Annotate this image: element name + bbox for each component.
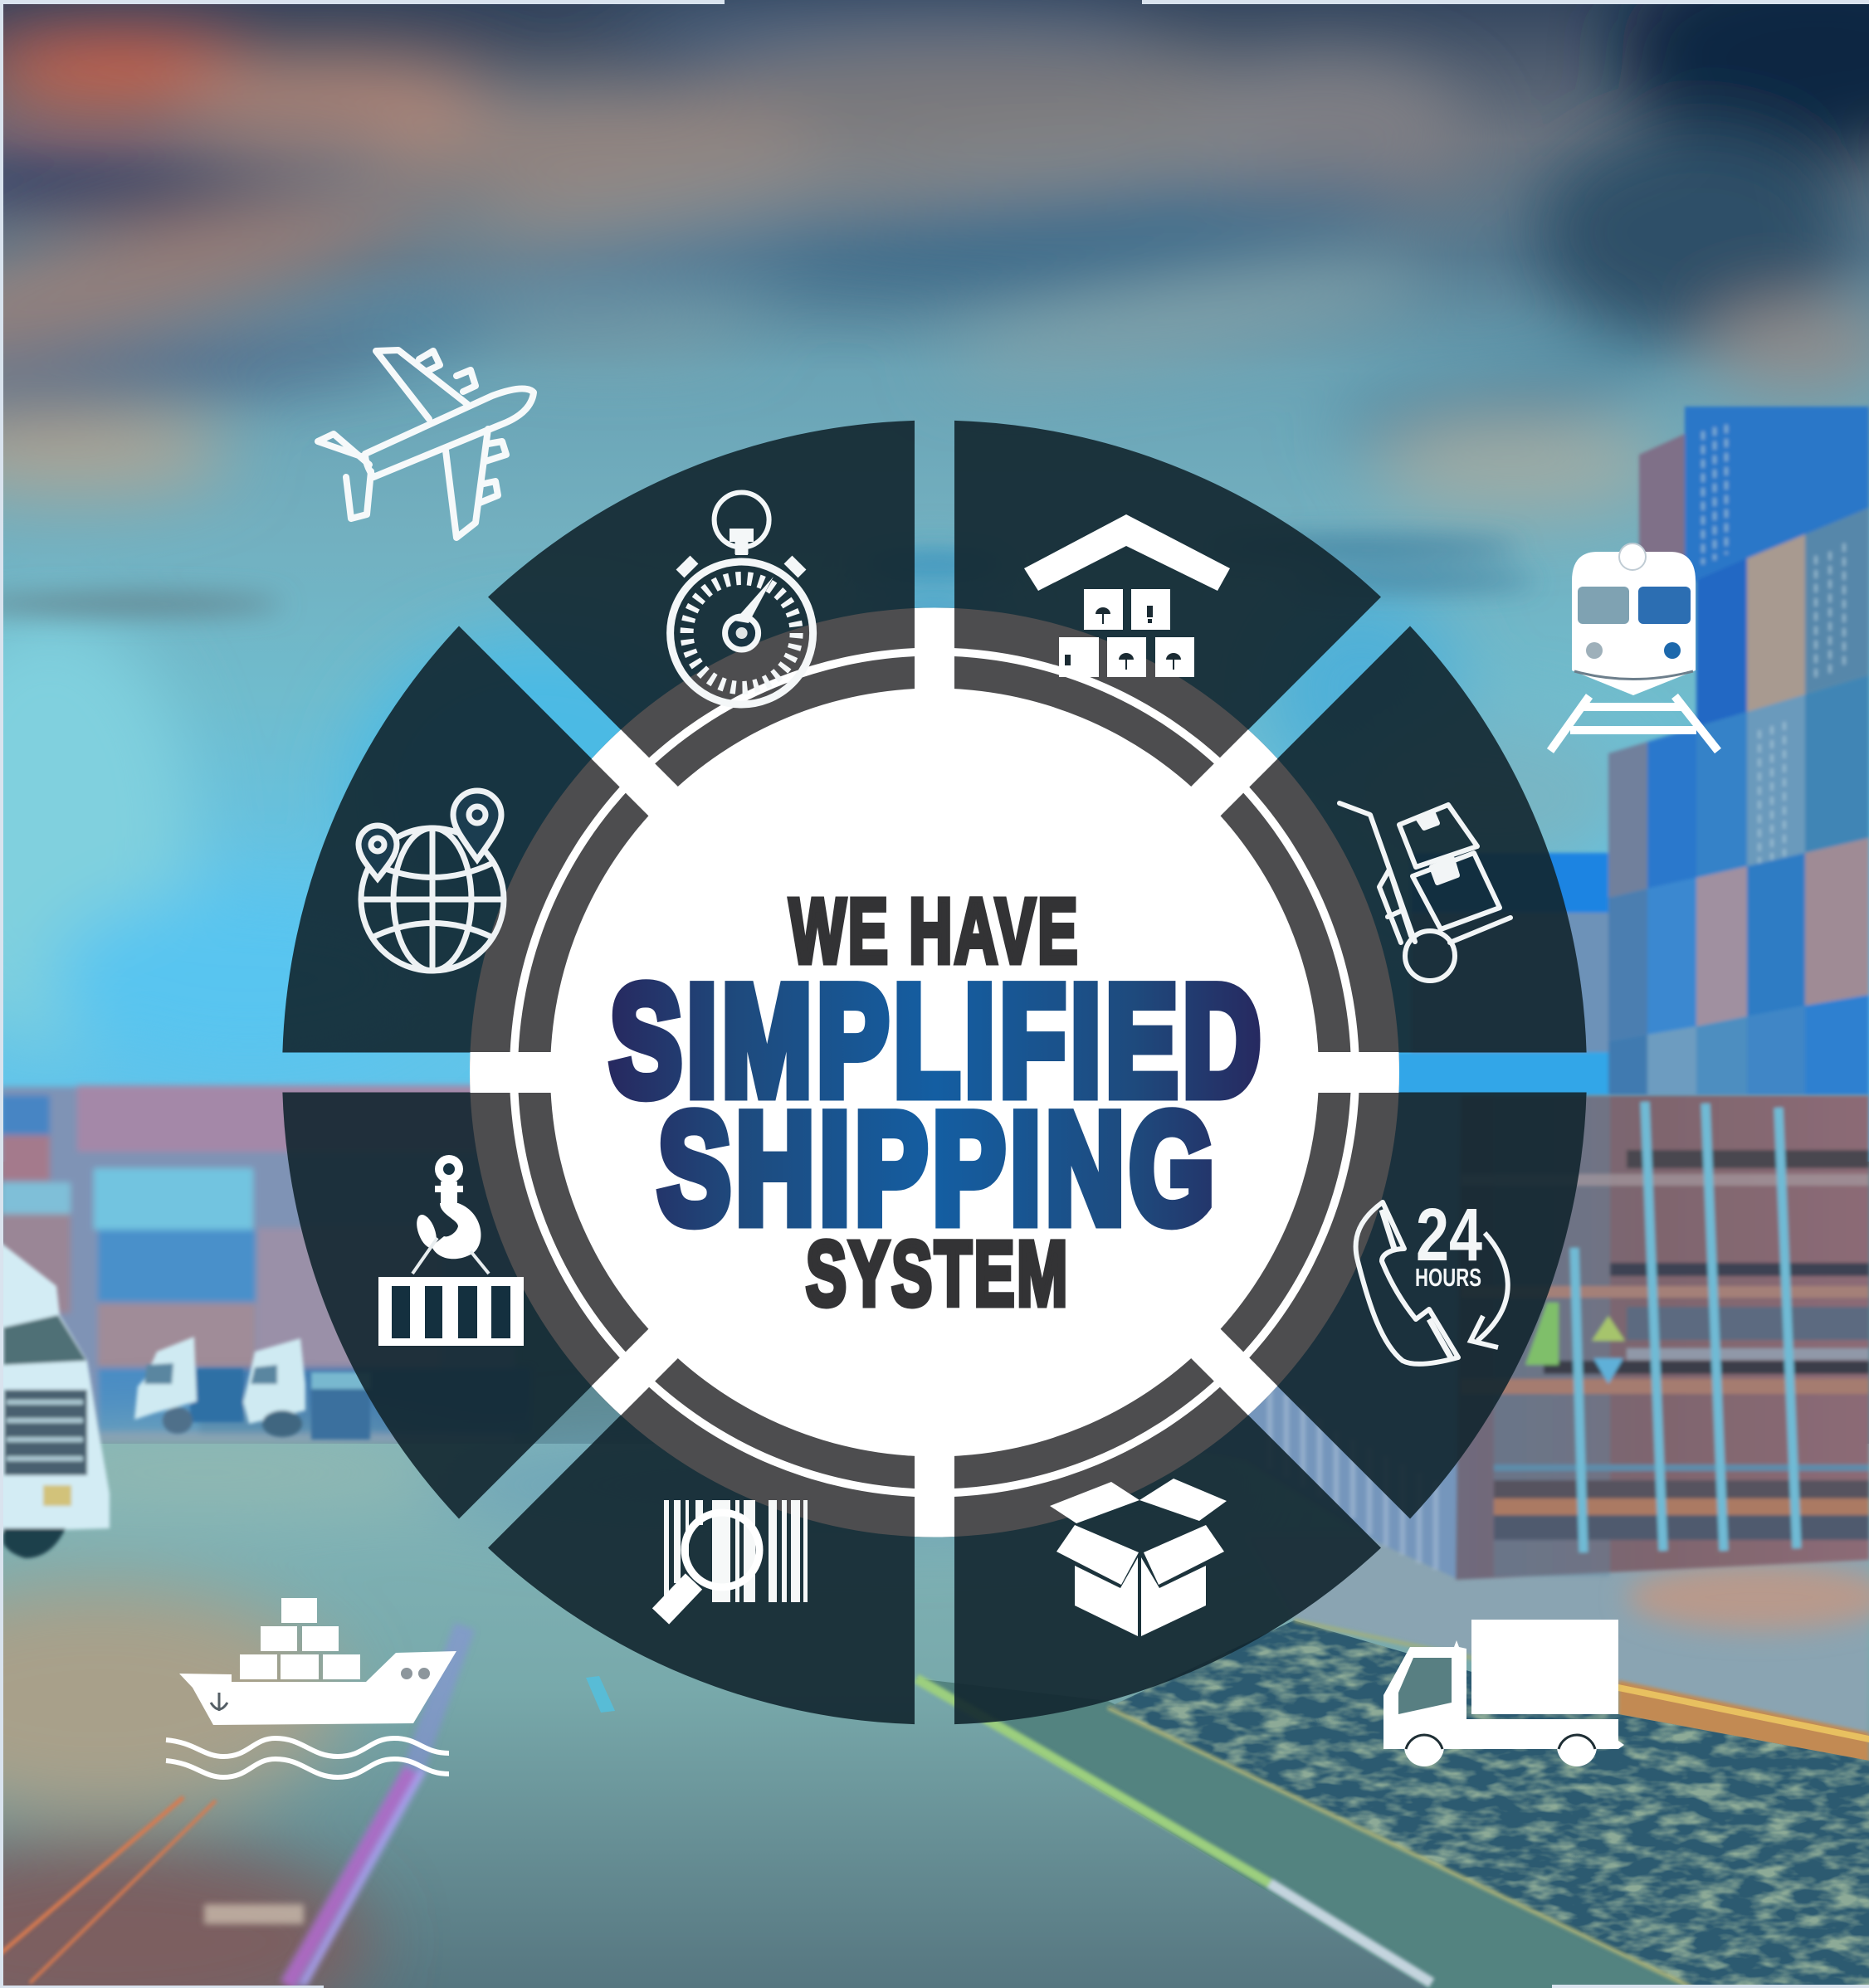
panel: packaging wedge	[954, 1122, 1381, 1724]
icon: telephone 24 hours	[1356, 1194, 1508, 1364]
panel: trolley wedge	[983, 626, 1587, 1052]
distant clouds	[0, 538, 1535, 614]
title line: shipping: SHIPPING	[658, 1081, 1219, 1255]
panel: crane wedge	[282, 1092, 886, 1518]
white spokes inside ring	[470, 607, 1399, 1537]
right upper container stack	[1328, 407, 1869, 1095]
icon: warehouse with boxes	[1024, 514, 1230, 677]
icon: open box	[1050, 1479, 1227, 1636]
icon: hand trolley with parcels	[1340, 803, 1510, 981]
purple light streak	[204, 1626, 465, 1986]
icon: globe with pins	[359, 791, 504, 971]
title line: simplified: SIMPLIFIED	[610, 953, 1266, 1128]
return arrow	[1471, 1233, 1508, 1347]
hours label: HOURS	[1415, 1263, 1481, 1292]
24 hours label: 24	[1416, 1194, 1482, 1277]
dark wedge segments	[282, 421, 1587, 1724]
icon: airplane	[318, 350, 534, 538]
grass texture	[1108, 1620, 1869, 1988]
icon: container ship	[166, 1598, 456, 1777]
circular diagram	[282, 421, 1587, 1724]
panel: global wedge	[282, 626, 886, 1052]
panel: support wedge	[983, 1092, 1587, 1518]
grey ring bands	[470, 607, 1399, 1537]
icon: crane hook and container	[378, 1155, 524, 1346]
panel: barcode wedge	[488, 1122, 915, 1724]
panel: warehouse wedge	[954, 421, 1381, 1024]
icon: barcode with magnifier	[661, 1500, 808, 1616]
title	[610, 880, 1266, 1325]
icon: stopwatch	[671, 493, 813, 704]
right lower container	[954, 1093, 1869, 1580]
left container stacks	[0, 1085, 531, 1444]
panel: time wedge	[488, 421, 915, 1024]
icon: delivery truck	[1383, 1620, 1624, 1766]
left trucks in photo	[0, 1242, 371, 1558]
sky clouds	[0, 0, 1869, 1070]
title line: we have: WE HAVE	[789, 880, 1080, 982]
title line: system: SYSTEM	[806, 1223, 1070, 1325]
icon: train	[1550, 543, 1718, 751]
road and ground	[0, 1440, 1869, 1988]
